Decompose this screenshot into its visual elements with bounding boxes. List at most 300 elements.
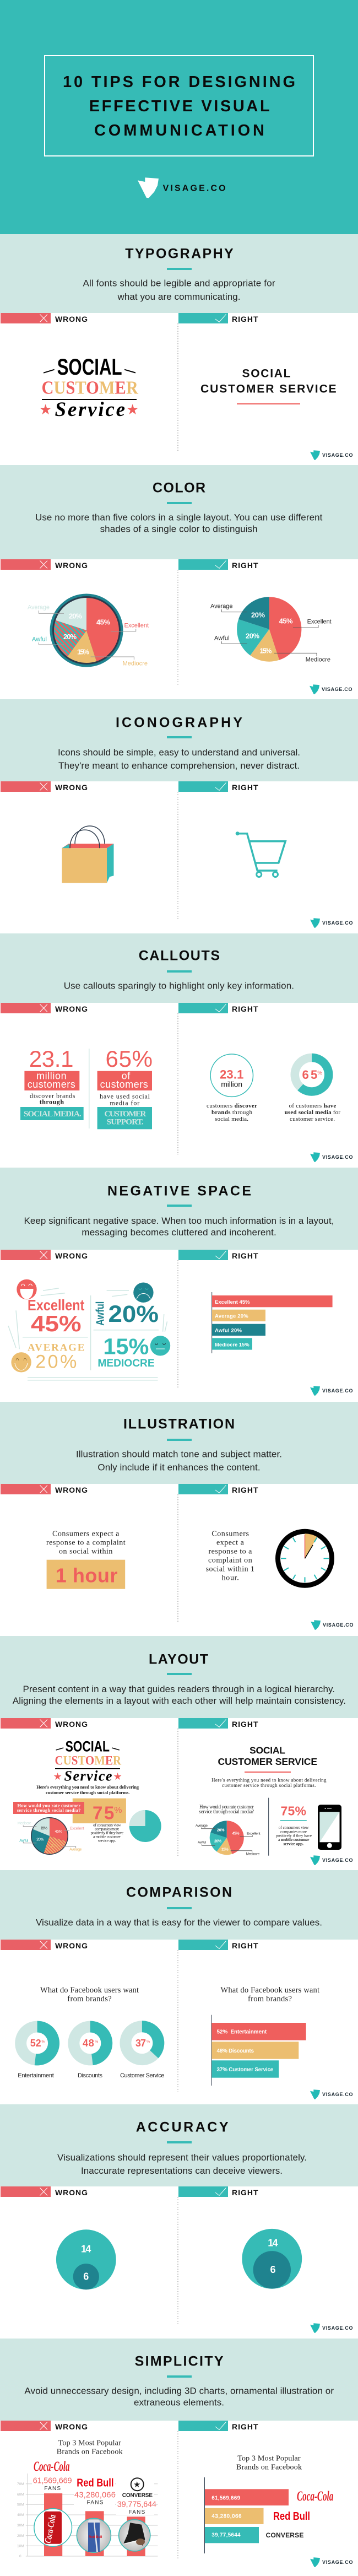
logo: red bull: Red Bull [273,2510,310,2523]
logo [310,1152,352,1162]
wrong: messy layout: of consumers view [93,1823,121,1828]
right: simple callouts: million [221,1079,242,1088]
right tab [178,781,258,792]
right: aligned layout: of consumers view [279,1825,309,1830]
logo: VISAGE.CO [322,2325,352,2331]
description [57,2152,307,2176]
lockup: SOCIAL [66,1738,110,1754]
lockup: Service [64,1768,112,1784]
logo [310,450,352,460]
wrong: over-used callouts: through [40,1098,64,1106]
wrong: donut charts: Entertainment [18,2072,54,2079]
wrong: over-used callouts: customers [100,1079,148,1090]
hero banner [0,0,358,234]
heading: TYPOGRAPHY [125,246,234,261]
heading: ICONOGRAPHY [116,715,242,730]
logo [310,2089,352,2099]
right: aligned layout: 75% [281,1803,306,1818]
logo: VISAGE.CO [322,1154,352,1160]
chart: cluttered pie: Mediocre [18,1822,31,1826]
photo: coca-cola can: Coca-Cola [42,2514,58,2544]
right: text with clock illustration [206,1530,332,1585]
right: simple bar chart: 39,77,5644 [211,2532,241,2539]
right: bar chart: 52% Entertainment [217,2029,267,2035]
wrong: decorated bar chart: 61,569,669 [33,2477,72,2486]
wrong: over-used callouts: of [122,1071,131,1082]
right: aligned layout: Here's everything you need to know about delivering [211,1778,327,1783]
wrong: decorated bar chart: 20M [17,2534,24,2538]
right: simple callouts: 23.1 [220,1067,243,1081]
right tab: RIGHT [232,561,258,570]
logo: red bull: Red Bull [77,2477,113,2489]
section: accuracy [0,2104,358,2333]
right: aligned layout: customer service through social platforms. [222,1783,316,1788]
description: Icons should be simple, easy to understand and universal. [58,747,300,758]
heading: SIMPLICITY [135,2353,224,2369]
wrong tab [1,1940,88,1950]
right tab [178,2186,258,2197]
right tab: RIGHT [232,1486,258,1494]
description [76,1449,282,1472]
description: Only include if it enhances the content. [97,1462,261,1472]
photo: coca-cola can [34,2509,72,2546]
right: text with clock illustration: Consumers [211,1530,249,1538]
wrong tab [1,1484,88,1494]
heading: ACCURACY [136,2119,229,2135]
right tab [178,1484,258,1494]
icon: clock [278,1531,332,1585]
chart: cluttered pie: Excellent [70,1827,84,1831]
wrong: donut charts [15,1986,164,2079]
hero logo: VISAGE.CO [163,184,226,193]
chart: customer service donut [120,2021,164,2065]
description: Visualize data in a way that is easy for the viewer to compare values. [36,1917,322,1927]
photo: red bull can: Red Bull [89,2536,102,2539]
right: simple callouts: % [317,1071,322,1077]
right: simple callouts: customer service. [290,1116,335,1122]
wrong tab: WRONG [55,1720,88,1729]
wrong: cluttered stats with faces: 20% [35,1352,77,1373]
chart: simple pie: 45% [232,1832,240,1835]
right tab [178,1003,258,1013]
right: simple callouts: brands through [211,1109,252,1116]
wrong: decorated bar chart: 50M [17,2503,24,2507]
wrong: messy layout: companies more [95,1827,120,1832]
description [83,278,275,302]
description: messaging becomes cluttered and incoherent. [82,1227,276,1238]
right: restrained pie chart: Excellent [307,619,332,625]
section: illustration [0,1402,358,1630]
description [24,2385,334,2407]
wrong: mixed fonts lockup: ★ [126,401,139,418]
section: iconography [0,699,358,928]
wrong: donut charts: Discounts [78,2072,102,2079]
logo [310,2323,352,2333]
wrong tab [1,781,88,792]
chart: simple pie: 20% [214,1840,222,1844]
section: callouts [0,933,358,1162]
right: aligned layout: service through social media? [199,1808,254,1814]
description: shades of a single color to distinguish [100,523,258,534]
right: simple bar chart: Top 3 Most Popular [237,2454,301,2462]
right: simple callouts: 65 [302,1068,317,1082]
description: Avoid unneccessary design, including 3D charts, ornamental illustration or [24,2385,334,2396]
right: aligned layout: positively if they have [276,1833,312,1838]
right: restrained pie chart: 20% [251,611,265,619]
chart: simple pie: Average [196,1824,208,1828]
wrong: decorated bar chart: FANS [87,2500,104,2506]
right: proportional circles: 6 [270,2264,276,2275]
logo: converse: CONVERSE [122,2493,153,2499]
wrong: over-coloured pie chart: Mediocre [123,661,148,667]
wrong: decorated bar chart: 0 [19,2555,21,2558]
right: bar chart: 48% Discounts [217,2048,254,2054]
wrong: text with highlight box: Consumers expect a [52,1530,120,1538]
wrong tab: WRONG [55,2422,88,2431]
right: restrained pie chart: Average [210,603,232,610]
photo: red bull can [77,2518,111,2552]
wrong: decorated bar chart: 43,280,066 [74,2491,116,2499]
right tab: RIGHT [232,2188,258,2197]
right: text with clock illustration: complaint on [208,1556,252,1564]
wrong: over-coloured pie chart: 45% [96,618,110,626]
chart: entertainment donut [15,2021,59,2065]
wrong: mixed fonts lockup [39,354,139,421]
wrong: messy layout: How would you rate customer [18,1802,80,1808]
right: aligned layout: service app. [283,1841,303,1846]
wrong tab [1,1003,88,1013]
wrong tab: WRONG [55,1486,88,1494]
description: Visualizations should represent their values proportionately. [57,2152,307,2163]
description: Aligning the elements in a layout with each other will help maintain consistency. [13,1695,346,1706]
icon: detailed shopping bag [62,826,113,883]
description: Inaccurate representations can deceive viewers. [81,2165,283,2176]
lockup: ★ [53,1771,62,1782]
icon: average face [11,1352,31,1372]
right: restrained pie chart: 15% [259,647,272,655]
wrong: decorated bar chart: FANS [44,2486,61,2492]
heading: NEGATIVE SPACE [107,1183,251,1198]
logo: VISAGE.CO [322,452,352,458]
heading: COLOR [153,480,205,495]
description: They're meant to enhance comprehension, never distract. [58,760,300,771]
description [13,1684,346,1706]
wrong: donut charts: What do Facebook users want [40,1986,139,1995]
title: EFFECTIVE VISUAL [89,98,270,115]
description [58,747,300,771]
logo: VISAGE.CO [323,1622,354,1628]
right: simple callouts [207,1054,340,1122]
wrong: messy layout: a mobile customer [93,1834,121,1839]
logo: converse: CONVERSE [266,2531,303,2539]
right: simple bar chart: Mediocre 15% [215,1342,249,1348]
logo [311,1620,354,1630]
chart: simple pie: 20% [217,1829,225,1833]
right tab [178,313,258,323]
wrong: messy layout: positively if they have [91,1830,124,1835]
logo: coca-cola: Coca-Cola [34,2459,69,2474]
right: text with clock illustration: response to a [208,1547,252,1556]
wrong tab [1,313,88,323]
chart: simple pie: Awful [198,1840,207,1844]
wrong tab: WRONG [55,1251,88,1260]
wrong: donut charts: Customer Service [120,2072,164,2079]
lockup [53,1738,122,1784]
right: simple bar chart: Brands on Facebook [236,2463,302,2471]
wrong: over-used callouts [20,1046,153,1129]
right: restrained pie chart: 45% [279,617,293,625]
wrong: over-used callouts: SUPPORT. [107,1118,144,1127]
wrong: text with highlight box: on social within [59,1547,112,1556]
chart: discounts donut: 48 [83,2038,94,2049]
section: typography [0,234,358,460]
wrong: over-used callouts: have used social [100,1092,150,1100]
wrong: cluttered stats with faces: 45% [31,1311,82,1336]
chart: entertainment donut: 52 [30,2038,41,2049]
logo: converse: ★ [133,2480,140,2489]
chart grid [26,2474,158,2556]
right: simple bar chart: Awful 20% [215,1328,242,1334]
wrong: decorated bar chart: 60M [17,2493,24,2497]
wrong: over-used callouts: media for [110,1099,139,1107]
wrong: messy layout: service through social media? [17,1807,80,1813]
chart: simple pie: Excellent [247,1832,261,1836]
chart: cluttered pie [18,1817,84,1855]
right: simple bar chart: Excellent 45% [215,1299,250,1305]
wrong: disproportionate circles: 14 [81,2244,91,2255]
wrong: mixed fonts lockup: CUSTOMER [42,377,138,398]
right tab [178,1940,258,1950]
wrong tab: WRONG [55,1941,88,1950]
right tab: RIGHT [232,1005,258,1013]
right: simple bar chart [204,2454,333,2553]
wrong tab [1,2186,88,2197]
right: simple callouts: social media. [215,1116,248,1122]
wrong: over-coloured pie chart: Average [28,604,50,611]
logo [310,2557,352,2567]
chart: cluttered pie: 20% [51,1844,58,1848]
right tab: RIGHT [232,2422,258,2431]
right tab [178,1250,258,1260]
wrong tab [1,1250,88,1260]
right tab [178,559,258,570]
wrong: disproportionate circles [56,2229,116,2289]
right: clean heading: SOCIAL [242,367,291,380]
right: bar chart: 37% Customer Service [217,2067,274,2073]
wrong: decorated bar chart: 39,775,644 [117,2501,156,2509]
icon: excellent face [17,1279,37,1299]
wrong: donut charts: from brands? [67,1995,112,2003]
wrong tab: WRONG [55,1005,88,1013]
logo [310,684,352,694]
section: comparison [0,1870,358,2099]
chart: customer service donut: 37 [135,2038,146,2049]
right: aligned layout: How would you rate customer [199,1804,254,1810]
right: bar chart [211,1986,319,2086]
wrong: cluttered stats with faces: 20% [108,1301,159,1327]
logo: converse [122,2478,153,2499]
wrong: over-coloured pie chart: 20% [63,633,77,641]
logo: VISAGE.CO [322,920,352,926]
chart: discounts donut: % [95,2040,98,2044]
right: simple bar chart: 43,280,066 [211,2514,242,2520]
right tab [178,1718,258,1729]
wrong: disproportionate circles: 6 [83,2271,89,2282]
lockup: CUSTOMER [55,1754,121,1768]
wrong: over-used callouts: 65% [106,1046,153,1072]
title frame [45,56,313,156]
logo: VISAGE.CO [322,687,352,692]
chart: entertainment donut: % [42,2040,45,2044]
logo: VISAGE.CO [322,2092,352,2097]
right: simple bar chart [211,1292,333,1353]
right: text with clock illustration: expect a [216,1538,245,1547]
wrong: over-coloured pie chart [28,594,149,667]
wrong: messy layout: Here's everything you need to know about delivering [36,1784,139,1790]
heading: COMPARISON [126,1885,232,1900]
lockup: ★ [113,1771,122,1782]
right: aligned layout: a mobile customer [278,1837,310,1842]
description: Illustration should match tone and subject matter. [76,1449,282,1459]
right: clean heading: CUSTOMER SERVICE [200,383,337,396]
wrong: decorated bar chart: 70M [17,2482,24,2486]
logo [310,1855,352,1865]
right tab: RIGHT [232,1720,258,1729]
right: restrained pie chart: Mediocre [306,657,330,663]
right tab: RIGHT [232,1251,258,1260]
chart: customer service donut: % [147,2040,150,2044]
wrong: over-coloured pie chart: 15% [77,648,89,656]
wrong: decorated bar chart: FANS [128,2509,145,2515]
right: restrained pie chart [210,597,332,663]
right: aligned layout [196,1745,341,1856]
chart: cluttered pie: 15% [41,1827,47,1830]
description: All fonts should be legible and appropriate for [83,278,275,288]
description: Present content in a way that guides readers through in a logical hierarchy. [23,1684,335,1694]
right: simple callouts: of customers have [289,1103,336,1109]
icon: mediocre face [150,1336,170,1355]
wrong tab: WRONG [55,315,88,323]
right: text with clock illustration: social within 1 [206,1565,254,1573]
wrong: over-used callouts: SOCIAL MEDIA. [24,1110,82,1119]
chart: cluttered pie: Average [69,1848,82,1852]
chart: 75 percent pie [129,1810,161,1842]
chart: discounts donut [68,2021,112,2065]
wrong: mixed fonts lockup: Service [55,398,125,421]
right: bar chart: What do Facebook users want [220,1986,319,1995]
wrong: text with highlight box: 1 hour [56,1564,118,1587]
logo: VISAGE.CO [322,1388,352,1394]
logo: coca-cola: Coca-Cola [297,2489,333,2504]
wrong: over-used callouts: discover brands [30,1092,75,1100]
heading: LAYOUT [149,1651,208,1667]
description: Use no more than five colors in a single layout. You can use different [35,512,323,522]
description [35,512,323,534]
wrong: over-coloured pie chart: 20% [69,612,82,620]
hero logo [138,177,226,198]
wrong: decorated bar chart [17,2439,158,2558]
section: negative space [0,1168,358,1396]
wrong tab: WRONG [55,561,88,570]
wrong: mixed fonts lockup: SOCIAL [57,354,122,380]
wrong tab [1,1718,88,1729]
wrong: over-coloured pie chart: Excellent [124,623,149,629]
wrong: decorated bar chart: Brands on Facebook [57,2448,123,2456]
wrong tab [1,559,88,570]
wrong: mixed fonts lockup: ★ [39,401,52,418]
section: layout [0,1636,358,1865]
wrong tab [1,2421,88,2431]
title: COMMUNICATION [94,122,264,139]
wrong: cluttered stats with faces: Excellent [28,1297,84,1314]
description: extraneous elements. [134,2397,224,2407]
wrong: cluttered stats with faces: Awful [95,1301,107,1326]
right tab [178,2421,258,2431]
description [24,1216,334,1238]
wrong: cluttered stats with faces: 15% [103,1333,149,1359]
right: clean heading [200,367,337,404]
right tab: RIGHT [232,315,258,323]
right: simple callouts: customers discover [207,1103,257,1109]
wrong: over-used callouts: CUSTOMER [105,1110,146,1119]
wrong: messy layout: % [114,1806,122,1815]
description: what you are communicating. [117,291,240,302]
description: Keep significant negative space. When too much information is in a layout, [24,1216,334,1226]
right: text with clock illustration: hour. [222,1574,239,1582]
wrong: cluttered stats with faces: AVERAGE [28,1342,84,1353]
wrong: cluttered stats with faces: MEDIOCRE [97,1358,155,1369]
wrong: messy layout [13,1738,161,1855]
chart: cluttered pie: Awful [19,1839,29,1843]
right: restrained pie chart: 20% [246,631,259,640]
icon: simple shopping cart [236,832,285,877]
wrong: decorated bar chart: 30M [17,2524,24,2528]
description: Use callouts sparingly to highlight only key information. [64,980,294,991]
photo: converse shoes [119,2520,150,2551]
wrong: over-used callouts: million [36,1071,67,1082]
chart: simple pie [196,1821,261,1856]
section: color [0,465,358,694]
wrong tab: WRONG [55,783,88,792]
chart: cluttered pie: 20% [36,1838,44,1842]
wrong: over-used callouts: customers [28,1079,75,1090]
wrong: text with highlight box: response to a complaint [46,1538,126,1547]
right: aligned layout: SOCIAL [249,1745,285,1756]
title: 10 TIPS FOR DESIGNING [63,73,295,91]
wrong: messy layout: customer service through social platforms. [46,1790,130,1795]
wrong: over-used callouts: 23.1 [29,1046,74,1072]
right tab: RIGHT [232,1941,258,1950]
icon: phone [318,1805,341,1850]
right: simple callouts: used social media for [285,1109,340,1116]
right: proportional circles [242,2229,302,2289]
wrong: decorated bar chart: Top 3 Most Popular [58,2439,121,2447]
chart: simple pie: Mediocre [246,1853,260,1856]
wrong: text with highlight box [46,1530,126,1589]
wrong: decorated bar chart: 10M [17,2545,24,2548]
logo [310,1386,352,1396]
right tab: RIGHT [232,783,258,792]
wrong: cluttered stats with faces [8,1279,170,1380]
title [63,73,295,139]
heading: ILLUSTRATION [123,1417,235,1432]
wrong tab: WRONG [55,2188,88,2197]
chart: cluttered pie: 45% [55,1830,62,1834]
right: bar chart: from brands? [248,1995,292,2003]
wrong: over-coloured pie chart: Awful [32,636,47,642]
logo [310,918,352,928]
wrong: messy layout: 75 [93,1803,114,1823]
